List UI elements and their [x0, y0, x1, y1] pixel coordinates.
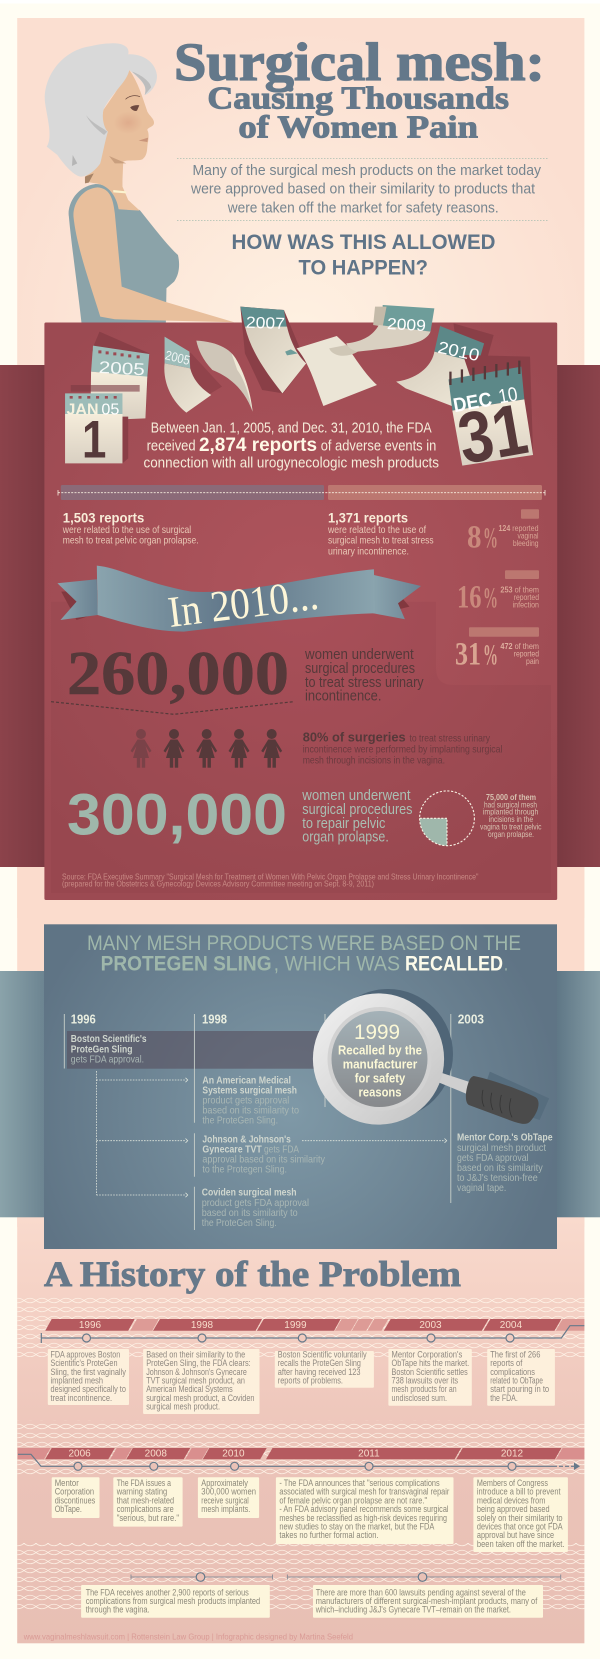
timeline ribbon: 1996 to 2004: 1999 [284, 1320, 307, 1331]
icon: magnifying glass: Recalled by the [338, 1044, 422, 1058]
text block: 1,371 reports: 1,371 reports [328, 510, 408, 526]
stat: 8% vaginal bleeding [467, 509, 539, 556]
stat: 8% vaginal bleeding: bleeding [513, 538, 539, 548]
heading: how was this allowed: TO HAPPEN? [298, 257, 428, 280]
event: 2012: approval but have since [477, 1530, 554, 1540]
text block: Mentor ObTape: vaginal tape. [457, 1182, 506, 1194]
stat: 8% vaginal bleeding: 124 reported [498, 523, 539, 533]
text block: Coviden: based on its similarity to [202, 1207, 298, 1219]
event: 2006: ObTape. [55, 1504, 82, 1514]
text block: Johnson and Johnson: approval based on its similarity [202, 1154, 326, 1166]
event: 2012: devices that once got FDA [477, 1522, 563, 1532]
stat: 260,000: 260,000 [67, 640, 289, 708]
event: 1996: implanted mesh [50, 1376, 103, 1386]
text block: American Medical Systems: Systems surgical mesh [202, 1085, 297, 1097]
year labels: 1998 [202, 1013, 227, 1027]
text block: 1996 approval: gets FDA approval. [71, 1053, 144, 1065]
event: 2010: receive surgical [201, 1495, 249, 1505]
text block: American Medical Systems [202, 1074, 299, 1127]
red band [0, 365, 600, 867]
panel: Protegen sling timeline [44, 924, 557, 1249]
event: 2008: "serious, but rare." [117, 1513, 179, 1523]
source note: (prepared for the Obstetrics & Gynecology Devices Advisory Committee meeting on Sept. 8-9, 2011) [62, 879, 374, 889]
timeline ribbon: 2006 to 2012: 2006 [68, 1449, 91, 1460]
event: 2011: associated with surgical mesh for transvaginal repair [279, 1487, 449, 1497]
event: 2010: Approximately [201, 1478, 248, 1488]
event: 2003: undisclosed sum. [392, 1393, 447, 1403]
text block: 2,874 reports [144, 420, 439, 472]
event: 600 lawsuits pending: which–including J&J's Gynecare TVT–remain on the market. [315, 1605, 511, 1615]
mesh pattern bands [17, 1295, 584, 1610]
heading: many mesh products [87, 932, 521, 976]
text block: 80% of surgeries: 80% of surgeries [303, 730, 406, 745]
icon: flying calendar pages [65, 305, 533, 466]
year labels [71, 1013, 484, 1027]
text block: 1,503 reports: mesh to treat pelvic organ prolapse. [63, 535, 199, 547]
event: 2012: been taken off the market. [477, 1539, 564, 1549]
text block: 1,371 reports: were related to the use of [327, 524, 426, 536]
stat: 300,000: surgical procedures [302, 801, 412, 818]
text block: 80% of surgeries: mesh through incisions in the vagina. [303, 754, 445, 766]
title: Surgical mesh: [174, 32, 545, 92]
event: 2006: Mentor [55, 1478, 79, 1488]
text block: Coviden: the ProteGen Sling. [202, 1217, 277, 1229]
text block: Mentor ObTape [457, 1132, 553, 1194]
event: 2010: 300,000 women [201, 1487, 256, 1497]
calendar labels: DEC [452, 389, 494, 417]
event: 2004 [487, 1349, 555, 1406]
event: 2012: being approved based [477, 1504, 550, 1514]
year labels: 2003 [458, 1013, 484, 1027]
event: 2012: introduce a bill to prevent [477, 1487, 561, 1497]
calendar labels: 2009 [387, 316, 426, 335]
title [174, 32, 545, 145]
event: 2011 [276, 1477, 454, 1544]
event: 2003: ObTape hits the market. [392, 1358, 469, 1368]
calendar labels: 1 [82, 411, 106, 470]
stat: 260,000: to treat stress urinary [305, 674, 424, 691]
timeline axis with arrow [18, 1454, 580, 1470]
timeline ribbon: 2006 to 2012: 2008 [145, 1449, 167, 1460]
event: 2003: 738 lawsuits over its [392, 1376, 459, 1386]
event: 1998 [143, 1349, 260, 1414]
text block: 75,000 of them: vagina to treat pelvic [480, 822, 542, 832]
text block: Mentor ObTape: to J&J's tension-free [457, 1172, 538, 1184]
event: 2004: The first of 266 [490, 1349, 540, 1359]
event: 1996: treat incontinence. [50, 1393, 112, 1403]
heading: many mesh products: RECALLED [405, 953, 503, 976]
text block: 80% of surgeries [303, 730, 502, 766]
text block: Mentor ObTape: surgical mesh product [457, 1142, 546, 1154]
calendar labels: JAN [66, 401, 98, 418]
heading: many mesh products: , WHICH WAS [274, 953, 400, 976]
event: 2004: the FDA. [490, 1393, 518, 1403]
source note: Source: FDA Executive Summary "Surgical Mesh for Treatment of Women With Pelvic Organ Prolapse and Stress Urinary Incontinence" [62, 871, 478, 881]
ongoing event lines [131, 1573, 561, 1581]
text block: 2,874 reports: received [147, 438, 196, 455]
icon: five women, four highlighted [130, 729, 282, 768]
timeline rules and approval bar [64, 1014, 451, 1230]
event: 2,900 more reports: through the vagina. [86, 1605, 150, 1615]
event: 2003: Mentor Corporation's [392, 1349, 463, 1359]
stat: 8% vaginal bleeding: % [483, 522, 498, 555]
event: 600 lawsuits pending [313, 1585, 543, 1618]
event: 1998: ProteGen Sling, the FDA clears: [146, 1358, 251, 1368]
icon: magnifying glass: for safety [355, 1071, 405, 1085]
heading: many mesh products: PROTEGEN SLING [101, 953, 272, 976]
calendar labels: 2005 [164, 347, 192, 368]
text block: 1,371 reports [327, 510, 434, 558]
timeline axis with event markers [41, 1326, 584, 1343]
event: 2004: start pouring in to [490, 1384, 549, 1394]
text block: American Medical Systems: based on its similarity to [202, 1105, 299, 1117]
event: 2,900 more reports: complications from surgical mesh products implanted [86, 1596, 260, 1606]
text block: Johnson and Johnson: Johnson & Johnson's [202, 1133, 291, 1145]
stat: 300,000: 300,000 [67, 782, 287, 847]
heading: how was this allowed: HOW WAS THIS ALLOWED [232, 231, 496, 254]
calendar labels: 2007 [246, 315, 285, 333]
event: 2004: reports of [490, 1358, 523, 1368]
text block: 1,503 reports [62, 510, 199, 547]
text block: 75,000 of them: implanted through [483, 807, 539, 817]
event: 1999: reports of problems. [278, 1376, 343, 1386]
text block: Johnson and Johnson: gets FDA [264, 1144, 299, 1156]
intro text block: Many of the surgical mesh products on the market today [192, 163, 542, 179]
event: 1999: recalls the ProteGen Sling [278, 1358, 361, 1368]
timeline ribbon: 1996 to 2004: 1998 [191, 1320, 214, 1331]
event: 2006 [52, 1477, 100, 1518]
stat: 260,000: incontinence. [305, 688, 382, 704]
text block: Johnson and Johnson: to the Protegen Sling. [202, 1164, 287, 1176]
intro text block: were taken off the market for safety reasons. [227, 200, 499, 216]
text block: 1,503 reports: 1,503 reports [63, 510, 144, 526]
connector arrows [96, 1071, 447, 1197]
event: 2012: Members of Congress [477, 1478, 548, 1488]
event: 1999 [275, 1349, 374, 1388]
event: 2011: meshes be reclassified as high-risk devices requiring [279, 1513, 447, 1523]
event: 1996: Scientific's ProteGen [50, 1358, 118, 1368]
event: 2010 [198, 1477, 259, 1518]
text block: 2,874 reports: Between Jan. 1, 2005, and Dec. 31, 2010, the FDA [151, 420, 432, 437]
stat: 8% vaginal bleeding: 8 [467, 520, 482, 556]
icon: magnifying glass: 1999 [354, 1021, 400, 1044]
calendar labels [66, 315, 533, 480]
event: 2012: medical devices from [477, 1495, 545, 1505]
calendar labels: 10 [497, 384, 519, 408]
text block: 1,503 reports: were related to the use of surgical [62, 524, 191, 536]
heading: how was this allowed [232, 231, 496, 280]
event: 1998: Johnson & Johnson's Gynecare [146, 1367, 247, 1377]
blue band [0, 971, 600, 1217]
intro text block [177, 158, 549, 220]
event: 1999: after having received 123 [278, 1367, 360, 1377]
text block: 75,000 of them: incisions in the [489, 814, 533, 824]
bar chart: report split [58, 485, 545, 500]
text block: 75,000 of them: organ prolapse. [488, 829, 534, 839]
ribbon: In 2010 [57, 566, 421, 637]
event: 2006: discontinues [55, 1495, 96, 1505]
icon: magnifying glass: manufacturer [343, 1058, 417, 1072]
text block: 1996 approval [71, 1033, 147, 1065]
event: 1998: surgical mesh product. [146, 1402, 220, 1412]
text block: Johnson and Johnson: Gynecare TVT [202, 1144, 262, 1156]
title: Causing Thousands [207, 80, 509, 116]
event: 2008: complications are [117, 1504, 174, 1514]
text block: 80% of surgeries: incontinence were performed by implanting surgical [303, 744, 502, 756]
timeline ribbon: 1996 to 2004: 2004 [500, 1320, 522, 1331]
event: 2003: mesh products for an [392, 1384, 457, 1394]
text block: 75,000 of them: 75,000 of them [486, 792, 536, 802]
stat: 8% vaginal bleeding: vaginal [518, 531, 539, 541]
event: 1996: FDA approves Boston [50, 1349, 120, 1359]
stat: 260,000: women underwent [304, 646, 414, 663]
text block: 75,000 of them [480, 792, 542, 839]
text block: 1996 approval: Boston Scientific's [71, 1033, 147, 1045]
heading: A History of the Problem: A History of the Problem [44, 1254, 461, 1294]
text block: American Medical Systems: the ProteGen Sling. [202, 1115, 278, 1127]
event: 2,900 more reports [81, 1585, 270, 1618]
event: 2011: - The FDA announces that "serious complications [279, 1478, 440, 1488]
stat: 300,000: women underwent [301, 787, 411, 804]
event: 2011: - An FDA advisory panel recommends some surgical [279, 1504, 448, 1514]
heading: many mesh products: MANY MESH PRODUCTS WERE BASED ON THE [87, 932, 521, 955]
event: 2003 [388, 1349, 472, 1406]
stat: 31% pain [455, 627, 539, 672]
source note [62, 871, 478, 889]
stat: 16% infection: reported [514, 592, 539, 602]
icon: magnifying glass: reasons [358, 1085, 402, 1099]
pie chart: 75,000 of 300,000 [420, 791, 474, 846]
timeline ribbon: 1996 to 2004: 2003 [419, 1320, 442, 1331]
stat: 31% pain: 472 of them [500, 641, 539, 651]
text block: Mentor ObTape: based on its similarity [457, 1162, 543, 1174]
stat: 16% infection: % [483, 581, 498, 614]
stat: 16% infection: infection [513, 599, 539, 609]
year labels: 1996 [71, 1013, 96, 1027]
stat: 260,000 [51, 640, 424, 714]
panel: FDA adverse event reports [44, 322, 557, 900]
stat: 31% pain: pain [526, 656, 539, 666]
event: 2008: that mesh-related [117, 1495, 174, 1505]
timeline ribbon: 1996 to 2004 [45, 1319, 584, 1331]
footer credit: www.vaginalmeshlawsuit.com | Rottenstein Law Group | Infographic designed by Martina Seefeld [23, 1632, 353, 1642]
illustration: woman in profile [45, 43, 234, 330]
text block: Johnson and Johnson [202, 1133, 326, 1176]
text block: Coviden: product gets FDA approval [202, 1197, 309, 1209]
ribbon: In 2010: In 2010... [165, 570, 321, 637]
text block: Coviden [202, 1187, 309, 1229]
event: 2006: Corporation [55, 1487, 94, 1497]
event: 1996: Sling, the first vaginally [50, 1367, 126, 1377]
timeline ribbon: 2006 to 2012: 2010 [222, 1449, 245, 1460]
calendar labels: 05 [101, 401, 119, 418]
timeline ribbon: 2006 to 2012 [18, 1448, 584, 1460]
event: 2004: complications [490, 1367, 535, 1377]
stat: 16% infection: 253 of them [500, 585, 539, 595]
timeline ribbon: 1996 to 2004: 1996 [79, 1320, 102, 1331]
event: 2008: The FDA issues a [117, 1478, 171, 1488]
text block: 1,371 reports: surgical mesh to treat stress [328, 535, 434, 547]
stat: 300,000 [67, 782, 412, 847]
event: 2008: warning stating [116, 1487, 167, 1497]
event: 1999: Boston Scientific voluntarily [278, 1349, 367, 1359]
text block: 2,874 reports: of adverse events in [321, 438, 436, 455]
text block: American Medical Systems: An American Medical [202, 1074, 291, 1086]
event: 600 lawsuits pending: manufacturers of different surgical-mesh-implant products, many of [316, 1596, 538, 1606]
event: 1996: designed specifically to [50, 1384, 126, 1394]
event: 1998: American Medical Systems [146, 1384, 233, 1394]
event: 1998: surgical mesh product, a Coviden [146, 1393, 254, 1403]
text block: 1996 approval: ProteGen Sling [71, 1043, 132, 1055]
text block: Mentor ObTape: Mentor Corp.'s ObTape [457, 1132, 553, 1144]
event: 2011: new studies to stay on the market, but the FDA [279, 1522, 434, 1532]
event: 2012: solely on their similarity to [477, 1513, 563, 1523]
event: 1996 [48, 1349, 129, 1405]
event: 2008 [113, 1477, 183, 1527]
stat: 300,000: organ prolapse. [302, 829, 389, 846]
event: 2010: mesh implants. [201, 1504, 250, 1514]
stat: 31% pain: reported [514, 649, 539, 659]
text block: 2,874 reports: 2,874 reports [199, 435, 317, 456]
event: 1998: Based on their similarity to the [146, 1349, 245, 1359]
intro text block: were approved based on their similarity to products that [190, 182, 535, 198]
stat: 31% pain: 31 [455, 636, 481, 672]
text block: Mentor ObTape: gets FDA approval [457, 1152, 528, 1164]
calendar labels: 31 [452, 389, 533, 480]
stat: 16% infection: 16 [457, 579, 482, 615]
event: 1998: TVT surgical mesh product, an [146, 1376, 245, 1386]
event: 2003: Boston Scientific settles [392, 1367, 468, 1377]
event: 2012 [473, 1477, 568, 1552]
text block: 2,874 reports: connection with all urogynecologic mesh products [144, 455, 439, 472]
calendar labels: 2005 [98, 358, 145, 379]
stat: 260,000: surgical procedures [305, 660, 415, 677]
text block: American Medical Systems: product gets approval [202, 1095, 289, 1107]
event: 2011: takes no further formal action. [279, 1530, 378, 1540]
stat: 16% infection [457, 570, 539, 615]
event: 2004: related to ObTape [490, 1376, 543, 1386]
event: 600 lawsuits pending: There are more than 600 lawsuits pending against several of the [316, 1587, 526, 1597]
title: of Women Pain [238, 109, 478, 145]
text block: 75,000 of them: had surgical mesh [484, 799, 537, 809]
text block: 80% of surgeries: to treat stress urinary [410, 733, 491, 745]
timeline ribbon: 2006 to 2012: 2011 [358, 1449, 380, 1460]
stat: 300,000: to repair pelvic [302, 815, 386, 832]
event: 2011: of female pelvic organ prolapse are not rare." [279, 1495, 427, 1505]
event: 2,900 more reports: The FDA receives another 2,900 reports of serious [86, 1587, 249, 1597]
text block: 1,371 reports: urinary incontinence. [328, 546, 409, 558]
calendar labels: 2010 [436, 338, 481, 365]
icon: magnifying glass [313, 989, 549, 1125]
timeline ribbon: 2006 to 2012: 2012 [501, 1449, 524, 1460]
text block: Coviden: Coviden surgical mesh [202, 1187, 297, 1199]
heading: many mesh products: . [504, 953, 508, 976]
stat: 31% pain: % [483, 638, 498, 671]
